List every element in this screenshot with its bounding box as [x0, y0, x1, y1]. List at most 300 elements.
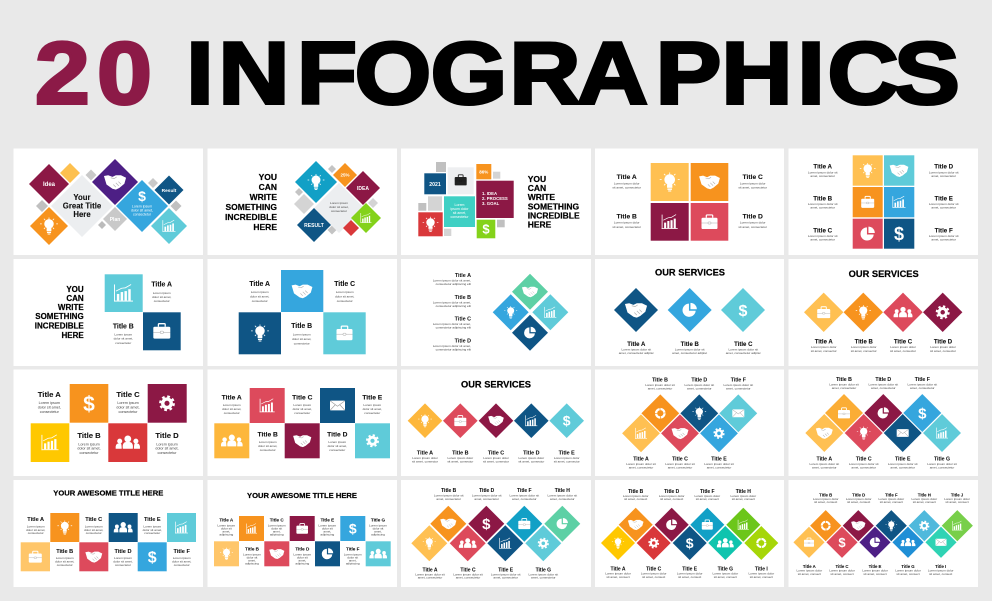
text: title G: Title G: [901, 564, 915, 569]
text: title G: Lorem ipsum: [369, 524, 387, 528]
tile: dollar: [884, 219, 914, 249]
tile: plan: Plan: [110, 217, 120, 223]
text: title F: amet,: [349, 558, 357, 562]
text: title D: Title D: [114, 549, 132, 555]
text: title B: sit amet, consectur: [447, 459, 473, 463]
text: title D: Lorem ipsum dolor sit amet,: [433, 344, 471, 348]
text: title F: Title F: [731, 378, 746, 384]
tile: pie: [544, 505, 581, 542]
text: title E: [677, 566, 703, 579]
text: title A: dolor sit amet,: [250, 295, 270, 299]
text: title A: amet, consectetur: [418, 576, 442, 580]
text: title F: Title F: [517, 488, 532, 494]
text: title C: [641, 566, 667, 579]
text: title I: Title I: [755, 566, 768, 572]
text: title B: amet,: [248, 558, 256, 562]
text: title A: Lorem ipsum dolor: [796, 568, 822, 572]
text: title B: Lorem ipsum dolor sit: [675, 348, 705, 352]
panel: diamond cluster great title: [14, 148, 203, 255]
text: title E: Title E: [895, 456, 911, 462]
text: title C: Title C: [856, 456, 872, 462]
text: title G: amet, consectetur: [930, 466, 954, 470]
tile: dollar: dolor sit amet,: [131, 208, 153, 212]
text: title F: [510, 488, 539, 501]
tile: pie: [859, 526, 891, 558]
text: title F: Title F: [885, 492, 898, 497]
text: title B: consectetur: [260, 448, 276, 452]
tile: briefcase: [691, 203, 728, 241]
text: title D: Title D: [852, 492, 865, 497]
tile: dollar: [340, 516, 365, 541]
tile: process list: 2. PROCESS: [482, 196, 508, 201]
tile: mail: [883, 414, 922, 452]
tile: dollar: $: [894, 224, 904, 244]
text: title C: [453, 568, 483, 580]
tile: process list: 1. IDEA: [482, 191, 497, 196]
tile: ring: [641, 394, 680, 433]
tile: dollar: $: [563, 413, 571, 429]
tile: dollar: [672, 526, 707, 560]
text: title C: Title C: [292, 394, 313, 401]
tile: briefcase: [448, 167, 474, 194]
tile: result: [154, 176, 184, 204]
text: title D: sit amet, consect: [847, 500, 870, 504]
panel: awesome title seven squares: [208, 480, 397, 587]
text: title A: Lorem ipsum: [27, 524, 45, 528]
text: title E: [554, 451, 580, 463]
text: title E: Title E: [498, 568, 514, 574]
text: title B: [672, 342, 708, 355]
text: title D: Lorem ipsum dolor sit: [869, 382, 898, 386]
text: title B: dolor sit amet,: [114, 337, 133, 341]
text: title A: [619, 342, 654, 355]
text: title E: Lorem ipsum dolor sit: [704, 462, 734, 466]
text: title E: dolor sit amet,: [143, 528, 162, 532]
text: title B: Title B: [855, 340, 873, 346]
tile: briefcase: [443, 403, 478, 438]
text: title C: sit amet, consectur: [890, 349, 916, 353]
text: title D: Title D: [455, 338, 471, 344]
text: title B: [243, 546, 261, 566]
text: title B: [813, 492, 839, 504]
text: title E: Title E: [559, 451, 575, 457]
tile: briefcase: [290, 516, 315, 541]
tile: mail: [719, 394, 758, 433]
text: title B: Lorem ipsum dolor sit: [645, 383, 675, 387]
text: title D: Lorem ipsum dolor: [930, 345, 956, 349]
tile: bulb: [214, 541, 239, 566]
title: 20: [35, 23, 152, 122]
text: title F: consectetur: [174, 563, 190, 567]
text: title F: Lorem ipsum dolor sit: [724, 383, 753, 387]
text: title B: Title B: [455, 295, 471, 301]
text: title A: Title A: [38, 390, 61, 399]
text: title D: sit amet, consect: [660, 497, 683, 501]
text: title G: Lorem ipsum dolor sit: [529, 572, 558, 576]
text: title C: [433, 317, 471, 330]
tile: result: Result: [162, 188, 177, 194]
heading: OUR SERVICES: [655, 268, 725, 278]
panel: two squares with heading: [14, 259, 203, 366]
text: title C: amet, consectetur: [851, 466, 876, 470]
text: title J: sit amet, consect: [945, 500, 969, 504]
tile: dollar: $: [482, 516, 491, 533]
text: title D: Title D: [295, 546, 310, 552]
text: title F: [724, 378, 753, 390]
tile: gear: [700, 414, 738, 453]
text: title A: [808, 164, 838, 178]
text: title A: Title A: [455, 273, 471, 279]
text: title I: sit amet, consect: [750, 575, 773, 579]
text: title F: Lorem ipsum: [344, 552, 362, 556]
tile: 2021: 2021: [429, 182, 441, 188]
text: title A: [38, 390, 61, 414]
text: title A: amet, consectetur: [812, 466, 837, 470]
tile: dollar: [138, 542, 167, 571]
text: title C: Lorem ipsum: [293, 403, 312, 407]
tile: bars: [239, 516, 264, 541]
text: title E: Lorem ipsum: [363, 403, 382, 407]
text: title D: Title D: [691, 378, 707, 384]
tile: bulb: [418, 212, 443, 236]
text: title A: Lorem ipsum dolor sit: [622, 348, 651, 352]
text: title E: Lorem ipsum dolor sit: [888, 462, 918, 466]
text: title D: [472, 488, 502, 501]
text: title A: Title A: [422, 568, 438, 574]
text: title A: Title A: [27, 517, 44, 523]
text: title D: dolor sit amet,: [328, 444, 347, 448]
tile: people: [449, 525, 486, 562]
text: title B: [434, 488, 464, 501]
text: title B: consectetur: [57, 563, 73, 567]
text: title D: [929, 164, 959, 178]
tile: handshake: [79, 542, 108, 571]
text: title C: Lorem ipsum dolor: [483, 456, 509, 460]
heading: SOMETHING: [35, 312, 84, 321]
text: title C: Lorem ipsum dolor sit: [808, 234, 838, 238]
text: title A: dolor sit amet,: [222, 407, 242, 411]
text: title F: Lorem ipsum dolor sit: [908, 382, 937, 386]
text: title A: consectetur: [252, 299, 268, 303]
text: title C: [890, 340, 916, 353]
text: title G: Title G: [934, 456, 950, 462]
text: title B: [77, 431, 101, 455]
text: title A: [433, 273, 471, 286]
text: title I: Title I: [935, 564, 946, 569]
text: title A: amet, consectetur: [810, 174, 835, 178]
text: title B: Lorem ipsum dolor sit amet,: [433, 300, 471, 304]
text: title B: [291, 323, 312, 345]
text: title D: [155, 431, 179, 455]
text: title F: sit amet, consect: [880, 500, 903, 504]
text: title E: Lorem ipsum dolor: [554, 456, 580, 460]
text: title B: Title B: [56, 549, 73, 555]
text: title A: sit amet, consectetur: [612, 186, 641, 190]
text: title A: Lorem ipsum: [217, 524, 236, 528]
tile: handshake: [618, 507, 653, 542]
text: title D: dolor sit amet,: [113, 560, 133, 564]
heading: HERE: [61, 331, 84, 340]
tile: dollar: consectetur: [133, 212, 152, 216]
text: title B: sit amet, consectur: [851, 349, 877, 353]
panel: zigzag seven diamonds: [788, 370, 978, 476]
tile: center text: dolor sit amet,: [329, 205, 349, 209]
text: title E: [888, 456, 918, 470]
text: title B: Title B: [441, 488, 457, 494]
tile: dollar: [903, 394, 942, 432]
text: title C: Lorem ipsum: [117, 401, 139, 405]
text: title H: Lorem ipsum dolor sit: [548, 494, 577, 498]
text: title C: consectetur: [294, 411, 310, 415]
text: title C: consectetur: [337, 299, 353, 303]
text: title I: Lorem ipsum dolor: [928, 568, 954, 572]
tile: idea: Idea: [43, 182, 56, 188]
text: title B: Title B: [245, 546, 260, 552]
tile: handshake: [92, 159, 138, 205]
text: title C: [738, 174, 767, 190]
text: title H: sit amet, consect: [913, 500, 936, 504]
text: title B: consectetur adipiscing elit: [436, 304, 471, 308]
text: title A: Lorem ipsum dolor: [412, 456, 438, 460]
text: title B: amet, consectetur: [648, 386, 672, 390]
tile: handshake: [430, 505, 467, 542]
text: title D: adipiscing: [295, 562, 309, 566]
text: title B: Lorem ipsum dolor sit: [434, 494, 464, 498]
text: title B: [258, 431, 278, 452]
text: title E: Lorem ipsum dolor: [677, 572, 703, 576]
text: title B: consectetur: [79, 451, 99, 455]
heading: HERE: [253, 222, 277, 232]
tile: people: [892, 526, 924, 558]
text: title E: [318, 518, 337, 536]
text: title C: Lorem ipsum dolor: [890, 345, 916, 349]
tile: dollar: [549, 403, 584, 438]
text: title E: Lorem ipsum dolor: [862, 568, 888, 572]
text: title D: [738, 213, 767, 229]
text: title F: [172, 549, 192, 567]
panel: our services three diamonds: [595, 259, 784, 366]
panel: four square grid: [595, 148, 784, 255]
text: title D: amet, consectetur: [474, 497, 499, 501]
text: title C: Lorem ipsum: [336, 290, 354, 294]
text: title A: Lorem ipsum: [223, 403, 241, 407]
text: title C: [84, 517, 104, 535]
text: title G: Lorem ipsum dolor sit: [927, 462, 957, 466]
panel: our services four diamonds: [788, 259, 978, 366]
tile: dollar: Lorem ipsum: [132, 204, 152, 208]
tile: pie: [853, 219, 883, 249]
tile: dollar: [116, 180, 168, 232]
tile: teal text: ipsum dolor: [450, 207, 469, 211]
tile: mail: [320, 388, 355, 423]
heading: OUR SERVICES: [461, 380, 531, 390]
text: title E: Title E: [362, 394, 383, 401]
text: title B: Lorem ipsum dolor: [614, 220, 640, 224]
text: title E: amet, consectetur: [707, 466, 731, 470]
text: title G: Lorem ipsum dolor: [712, 572, 738, 576]
text: title H: Title H: [918, 492, 931, 497]
panel: awesome title six squares: [14, 480, 203, 587]
text: title A: amet,: [222, 530, 230, 534]
text: title C: Lorem ipsum: [268, 524, 286, 528]
text: title D: consectetur adipiscing elit: [436, 347, 471, 351]
text: title B: Lorem ipsum dolor: [851, 345, 877, 349]
text: title C: consectetur: [86, 531, 102, 535]
tile: center title: Your: [73, 193, 91, 202]
text: title C: sit amet, consect: [642, 575, 665, 579]
text: title D: Lorem ipsum dolor: [659, 494, 685, 498]
tile: handshake: [660, 414, 700, 453]
text: title D: [518, 451, 544, 463]
text: title F: Lorem ipsum dolor sit: [929, 234, 959, 238]
tile: 86 percent: 86%: [479, 169, 488, 174]
tile: people: [366, 541, 391, 566]
tile: handshake: [691, 163, 728, 201]
text: title B: amet, consectetur adipisc: [672, 351, 708, 355]
text: title D: Lorem ipsum dolor sit: [472, 494, 502, 498]
text: title B: Lorem ipsum dolor sit: [808, 202, 838, 206]
text: title A: [796, 564, 822, 576]
tile: bars: [487, 525, 524, 562]
text: title C: dolor sit amet,: [116, 406, 140, 410]
panel: our services five diamonds: [401, 370, 591, 476]
tile: handshake: [805, 414, 844, 452]
text: title A: Lorem ipsum dolor: [614, 181, 640, 185]
text: title C: Lorem ipsum dolor sit: [665, 462, 695, 466]
tile: bulb: [411, 525, 448, 562]
tile: bars: [351, 203, 381, 233]
heading: CAN: [66, 294, 84, 303]
text: title C: adipiscing: [270, 532, 284, 536]
tile: pie: [654, 507, 689, 542]
tile: 2021: [424, 173, 446, 194]
text: title G: [895, 564, 921, 576]
text: title B: Lorem ipsum: [293, 332, 311, 336]
text: title E: Lorem ipsum dolor sit: [929, 202, 959, 206]
text: title A: Lorem ipsum dolor sit: [810, 462, 839, 466]
text: title G: adipiscing: [371, 532, 385, 536]
text: title A: Lorem ipsum: [39, 401, 60, 405]
tile: handshake: [264, 541, 289, 566]
text: title D: Lorem ipsum: [114, 556, 132, 560]
text: title A: sit amet, consectur: [811, 349, 837, 353]
text: title F: adipiscing: [346, 562, 360, 566]
tile: teal text: Lorem: [455, 203, 465, 207]
tile: process list: 3. GOAL: [482, 201, 500, 206]
text: title D: Title D: [155, 431, 179, 440]
tile: mail: [925, 526, 957, 558]
title: INFOGRAPHICS: [186, 23, 960, 122]
text: title C: dolor sit amet,: [84, 528, 104, 532]
text: title A: [626, 456, 656, 470]
text: title A: [605, 566, 631, 579]
tile: dollar: $: [838, 535, 846, 550]
text: title D: [930, 340, 956, 353]
text: title A: Title A: [219, 518, 234, 522]
heading: [225, 172, 277, 232]
tile: bulb: [50, 513, 79, 542]
text: title F: amet, consectetur: [726, 386, 751, 390]
text: title F: amet, consectetur: [931, 238, 956, 242]
heading: WRITE: [528, 192, 555, 202]
text: title D: consectetur: [157, 451, 177, 455]
text: title A: Lorem ipsum: [251, 290, 269, 294]
tile: bulb: [30, 207, 68, 245]
text: title B: Lorem ipsum dolor: [623, 494, 649, 498]
tile: bulb: [844, 293, 883, 332]
text: title D: [433, 338, 471, 351]
tile: ring: [744, 526, 779, 560]
panel: six square grid: [788, 148, 978, 255]
tile: gear: [355, 423, 390, 458]
text: title E: sit amet, consect: [863, 572, 887, 576]
text: title D: dolor sit amet,: [155, 447, 179, 451]
text: title B: Title B: [617, 213, 637, 220]
tile: pie: [864, 394, 903, 432]
tile: gear: [148, 384, 187, 423]
text: title C: amet, consectetur adipisc: [726, 351, 761, 355]
tile: pie: [668, 288, 712, 332]
tile: briefcase: [21, 542, 50, 571]
text: title G: [927, 456, 957, 470]
tile: bars: [884, 187, 914, 217]
tile: handshake: [285, 423, 320, 458]
text: title A: Lorem ipsum dolor: [811, 345, 837, 349]
tile: people: [708, 526, 743, 560]
tile: gear: [525, 525, 562, 562]
tile: ring: [810, 510, 842, 542]
panel: five square checker: [208, 370, 397, 476]
text: title B: dolor sit amet,: [77, 447, 101, 451]
text: title B: Lorem ipsum: [114, 332, 133, 336]
text: title C: dolor sit: [271, 526, 282, 530]
text: title C: [292, 394, 313, 415]
text: title C: Title C: [813, 227, 833, 234]
text: title C: amet, consectetur: [810, 238, 835, 242]
text: title A: adipiscing: [219, 532, 233, 536]
tile: people: [214, 423, 249, 458]
tile: bulb: [600, 526, 636, 560]
text: title D: amet,: [298, 558, 306, 562]
text: title C: Title C: [646, 566, 662, 572]
text: title D: [869, 377, 898, 390]
text: title D: [293, 546, 312, 566]
text: title F: dolor sit amet,: [172, 560, 192, 564]
heading: WRITE: [250, 192, 277, 202]
text: title B: Title B: [77, 431, 101, 440]
text: title F: Title F: [346, 546, 360, 552]
tile: briefcase: [690, 507, 725, 542]
tile: center text: Lorem ipsum: [330, 201, 348, 205]
tile: idea: [346, 171, 380, 205]
tile: teal text: sit amet,: [453, 211, 466, 215]
text: title C: [665, 456, 695, 470]
tile: result: RESULT: [304, 223, 324, 229]
tile: people: [883, 293, 923, 332]
text: title A: Title A: [417, 451, 433, 457]
text: title E: [143, 517, 162, 535]
text: title E: [362, 394, 383, 415]
text: title G: Title G: [371, 518, 386, 522]
text: title A: Title A: [151, 281, 172, 288]
text: title C: Title C: [270, 518, 284, 522]
text: title A: [151, 281, 172, 303]
text: title B: adipiscing: [245, 562, 259, 566]
tile: bars: [622, 414, 660, 453]
text: title F: amet, consectetur: [512, 497, 537, 501]
text: title G: sit amet, consect: [896, 572, 920, 576]
panel: zigzag ten diamonds: [788, 480, 978, 587]
